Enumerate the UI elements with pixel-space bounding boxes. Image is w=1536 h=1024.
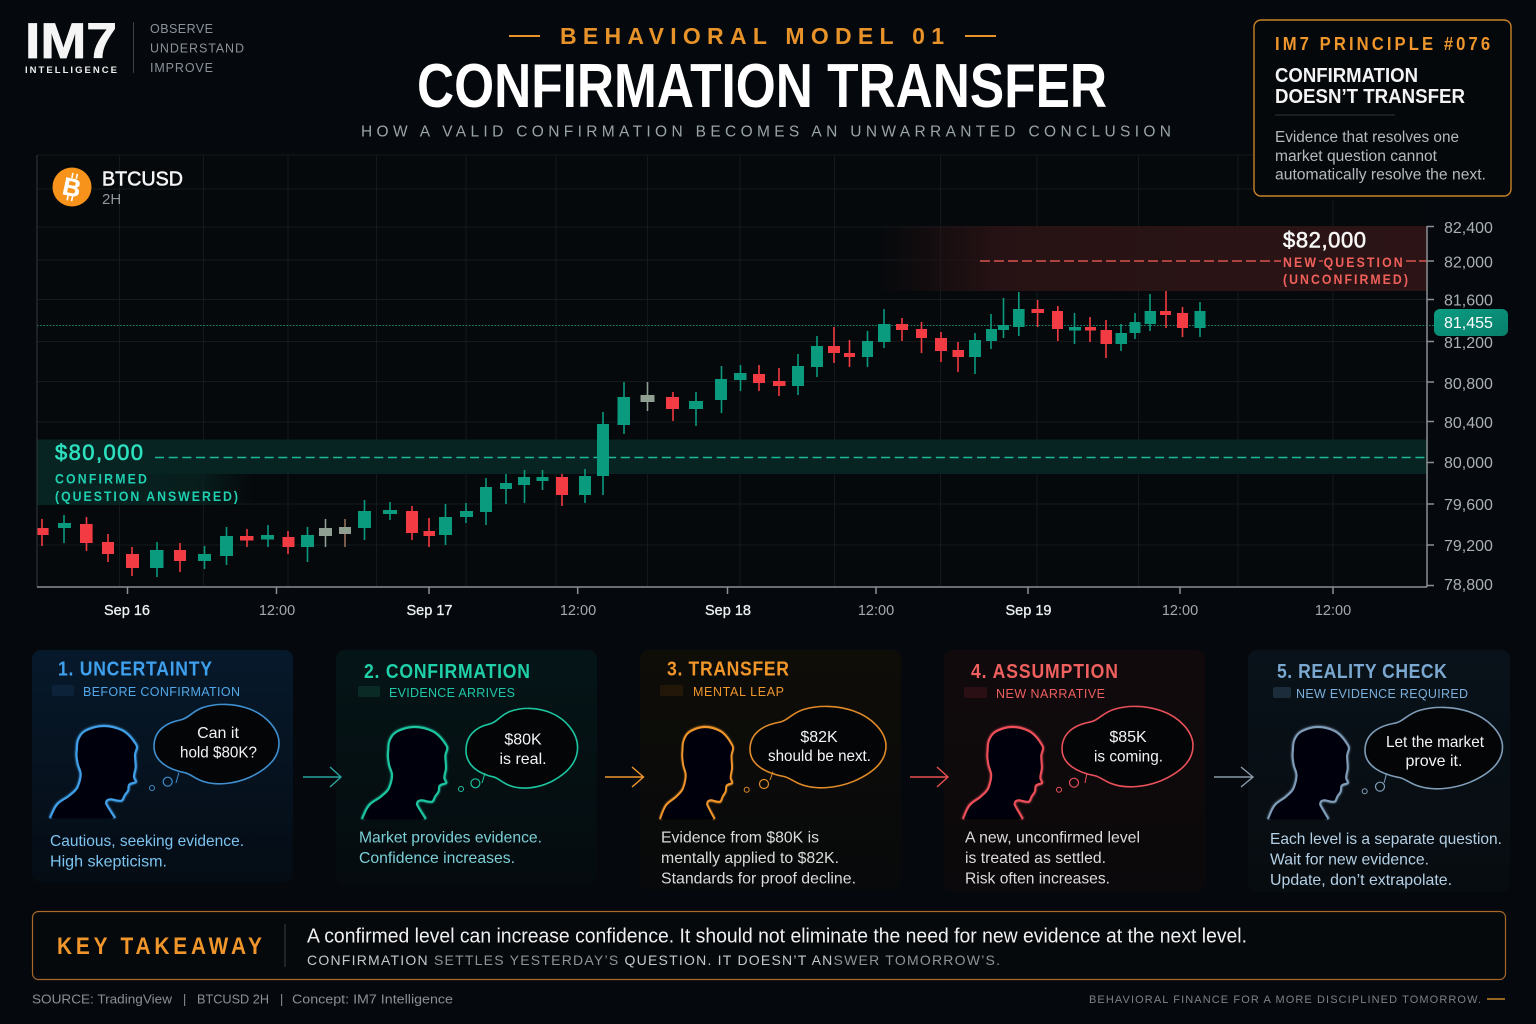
- time axis labels: 12:00: [1162, 603, 1198, 619]
- arrow: step 3 to 4: [910, 767, 948, 787]
- footer: source: |: [183, 992, 186, 1006]
- current price line: [37, 324, 1434, 326]
- price axis labels: 78,800: [1444, 577, 1493, 594]
- principle number: IM7 PRINCIPLE #076: [1275, 33, 1490, 54]
- logo: IM7 Intelligence: INTELLIGENCE: [25, 65, 117, 76]
- price axis labels: [1444, 220, 1493, 594]
- current price tag: 81,455: [1444, 315, 1493, 332]
- thought bubble: prove it.: [1406, 753, 1462, 770]
- confirmed zone $80,000: [37, 440, 1427, 505]
- new question zone $82,000: [880, 226, 1427, 291]
- step heading: 4. ASSUMPTION: [971, 660, 1118, 682]
- description: High skepticism.: [50, 854, 167, 870]
- thought bubble: is coming.: [1094, 748, 1163, 766]
- time axis labels: Sep 16: [104, 603, 150, 619]
- description: Cautious, seeking evidence.: [50, 833, 244, 850]
- symbol label: 2H: [102, 191, 121, 208]
- time axis labels: [104, 603, 1351, 619]
- callout: $82,000 new question: $82,000: [1283, 228, 1366, 252]
- price axis labels: 82,000: [1444, 254, 1493, 272]
- callout: $80,000 confirmed: (QUESTION ANSWERED): [55, 488, 238, 504]
- panel: IM7 principle: [1254, 20, 1511, 196]
- arrow: step 2 to 3: [605, 767, 644, 787]
- footer: tagline: BEHAVIORAL FINANCE FOR A MORE DISCIPLINED TOMORROW.: [1089, 994, 1481, 1006]
- principle body: [1275, 129, 1486, 184]
- takeaway statement: A confirmed level can increase confidence. It should not eliminate the need for new evidence at the next level.: [307, 926, 1247, 948]
- description: Confidence increases.: [359, 850, 515, 867]
- panel: 1 uncertainty: [32, 650, 293, 882]
- description: Standards for proof decline.: [661, 870, 856, 888]
- thought bubble: $85K: [1109, 729, 1147, 746]
- callout: $80,000 confirmed: [55, 440, 238, 504]
- panel: 4 assumption: [944, 650, 1205, 891]
- step heading: 5. REALITY CHECK: [1277, 660, 1447, 682]
- price axis labels: 80,800: [1444, 376, 1493, 393]
- title: CONFIRMATION TRANSFER: [417, 52, 1107, 121]
- principle body: market question cannot: [1275, 148, 1438, 165]
- kicker: BEHAVIORAL MODEL 01: [560, 23, 944, 49]
- principle body: Evidence that resolves one: [1275, 129, 1459, 146]
- callout: $82,000 new question: (UNCONFIRMED): [1283, 271, 1408, 287]
- step heading: 2. CONFIRMATION: [364, 660, 530, 682]
- thought bubble: [150, 704, 279, 790]
- description: [661, 830, 856, 888]
- thought bubble: [1056, 706, 1193, 792]
- step heading: 3. TRANSFER: [667, 657, 789, 680]
- description: Wait for new evidence.: [1270, 852, 1429, 868]
- time axis labels: 12:00: [1315, 603, 1351, 619]
- description: [50, 833, 244, 870]
- description: Evidence from $80K is: [661, 830, 819, 846]
- price axis labels: 79,600: [1444, 497, 1493, 514]
- callout: $80,000 confirmed: $80,000: [55, 440, 143, 465]
- candlesticks: [37, 291, 1206, 577]
- step heading: 1. UNCERTAINTY: [58, 657, 212, 680]
- footer: source: BTCUSD 2H: [197, 992, 269, 1006]
- price axis labels: 80,000: [1444, 455, 1493, 472]
- description: Update, don’t extrapolate.: [1270, 872, 1452, 889]
- header: kicker, title and subtitle: [361, 23, 1171, 140]
- icon: bitcoin: [52, 168, 92, 206]
- thought bubble: [458, 708, 578, 792]
- price axis labels: 82,400: [1444, 220, 1493, 237]
- step subheading: NEW EVIDENCE REQUIRED: [1296, 687, 1468, 701]
- price axis labels: 79,200: [1444, 538, 1493, 555]
- panel: key takeaway: [32, 912, 1506, 980]
- thought bubble: Can it: [197, 725, 239, 742]
- price axis labels: 81,200: [1444, 335, 1493, 352]
- axes: [37, 155, 1434, 594]
- tagline: observe understand improve: UNDERSTAND: [150, 42, 244, 56]
- step subheading: EVIDENCE ARRIVES: [389, 686, 515, 700]
- footer: source: |: [280, 992, 283, 1006]
- principle heading: CONFIRMATION: [1275, 65, 1418, 87]
- callout: $80,000 confirmed: CONFIRMED: [55, 471, 147, 487]
- tagline: observe understand improve: IMPROVE: [150, 61, 213, 75]
- footer: source: [32, 992, 453, 1006]
- icon: head silhouette: [660, 727, 733, 819]
- callout: $82,000 new question: NEW QUESTION: [1283, 254, 1403, 270]
- takeaway subline: CONFIRMATION SETTLES YESTERDAY’S QUESTION. IT DOESN’T ANSWER TOMORROW’S.: [307, 952, 1000, 968]
- symbol label: BTCUSD: [102, 168, 183, 190]
- subtitle: HOW A VALID CONFIRMATION BECOMES AN UNWARRANTED CONCLUSION: [361, 124, 1171, 140]
- footer: source: SOURCE: TradingView: [32, 992, 173, 1006]
- panel: 5 reality check: [1248, 650, 1510, 892]
- principle heading: [1275, 65, 1466, 108]
- icon: head silhouette: [963, 727, 1043, 819]
- step subheading: BEFORE CONFIRMATION: [83, 685, 240, 699]
- logo: IM7 Intelligence: IM7: [25, 13, 117, 69]
- description: Risk often increases.: [965, 870, 1110, 888]
- description: Each level is a separate question.: [1270, 831, 1502, 848]
- thought bubble: is real.: [499, 751, 547, 768]
- panel: 3 transfer: [640, 650, 901, 890]
- time axis labels: 12:00: [560, 603, 596, 619]
- callout: $82,000 new question: [1283, 228, 1408, 287]
- description: [359, 830, 542, 867]
- panel: 2 confirmation: [336, 650, 597, 884]
- symbol label: [102, 168, 183, 208]
- thought bubble: should be next.: [768, 748, 871, 765]
- thought bubble: hold $80K?: [180, 744, 257, 762]
- tagline: observe understand improve: [150, 22, 244, 75]
- icon: bitcoin: B: [60, 172, 84, 204]
- principle body: automatically resolve the next.: [1275, 166, 1486, 184]
- time axis labels: Sep 18: [705, 603, 751, 619]
- description: A new, unconfirmed level: [965, 830, 1140, 846]
- footer: source: Concept: IM7 Intelligence: [292, 992, 453, 1006]
- step subheading: MENTAL LEAP: [693, 685, 784, 699]
- icon: head silhouette: [362, 727, 447, 819]
- thought bubble: [744, 706, 886, 792]
- icon: head silhouette: [1268, 727, 1349, 819]
- arrow: step 4 to 5: [1214, 767, 1253, 787]
- tagline: observe understand improve: OBSERVE: [150, 22, 213, 36]
- time axis labels: 12:00: [259, 603, 295, 619]
- step subheading: NEW NARRATIVE: [996, 687, 1105, 701]
- price axis labels: 80,400: [1444, 415, 1493, 432]
- time axis labels: 12:00: [858, 603, 894, 619]
- thought bubble: $82K: [800, 729, 838, 746]
- thought bubble: [1362, 707, 1502, 794]
- thought bubble: Let the market: [1386, 734, 1485, 751]
- arrow: step 1 to 2: [303, 767, 341, 787]
- time axis labels: Sep 17: [407, 603, 452, 619]
- description: [1270, 831, 1502, 889]
- description: [965, 830, 1140, 888]
- takeaway label: KEY TAKEAWAY: [57, 931, 262, 959]
- icon: head silhouette: [50, 726, 137, 818]
- price axis labels: 81,600: [1444, 292, 1493, 310]
- description: mentally applied to $82K.: [661, 850, 839, 867]
- description: Market provides evidence.: [359, 830, 542, 846]
- thought bubble: $80K: [504, 732, 542, 748]
- principle heading: DOESN’T TRANSFER: [1275, 86, 1466, 108]
- current price tag: [1434, 309, 1508, 336]
- time axis labels: Sep 19: [1006, 603, 1051, 619]
- price chart: [37, 155, 1508, 619]
- description: is treated as settled.: [965, 850, 1106, 867]
